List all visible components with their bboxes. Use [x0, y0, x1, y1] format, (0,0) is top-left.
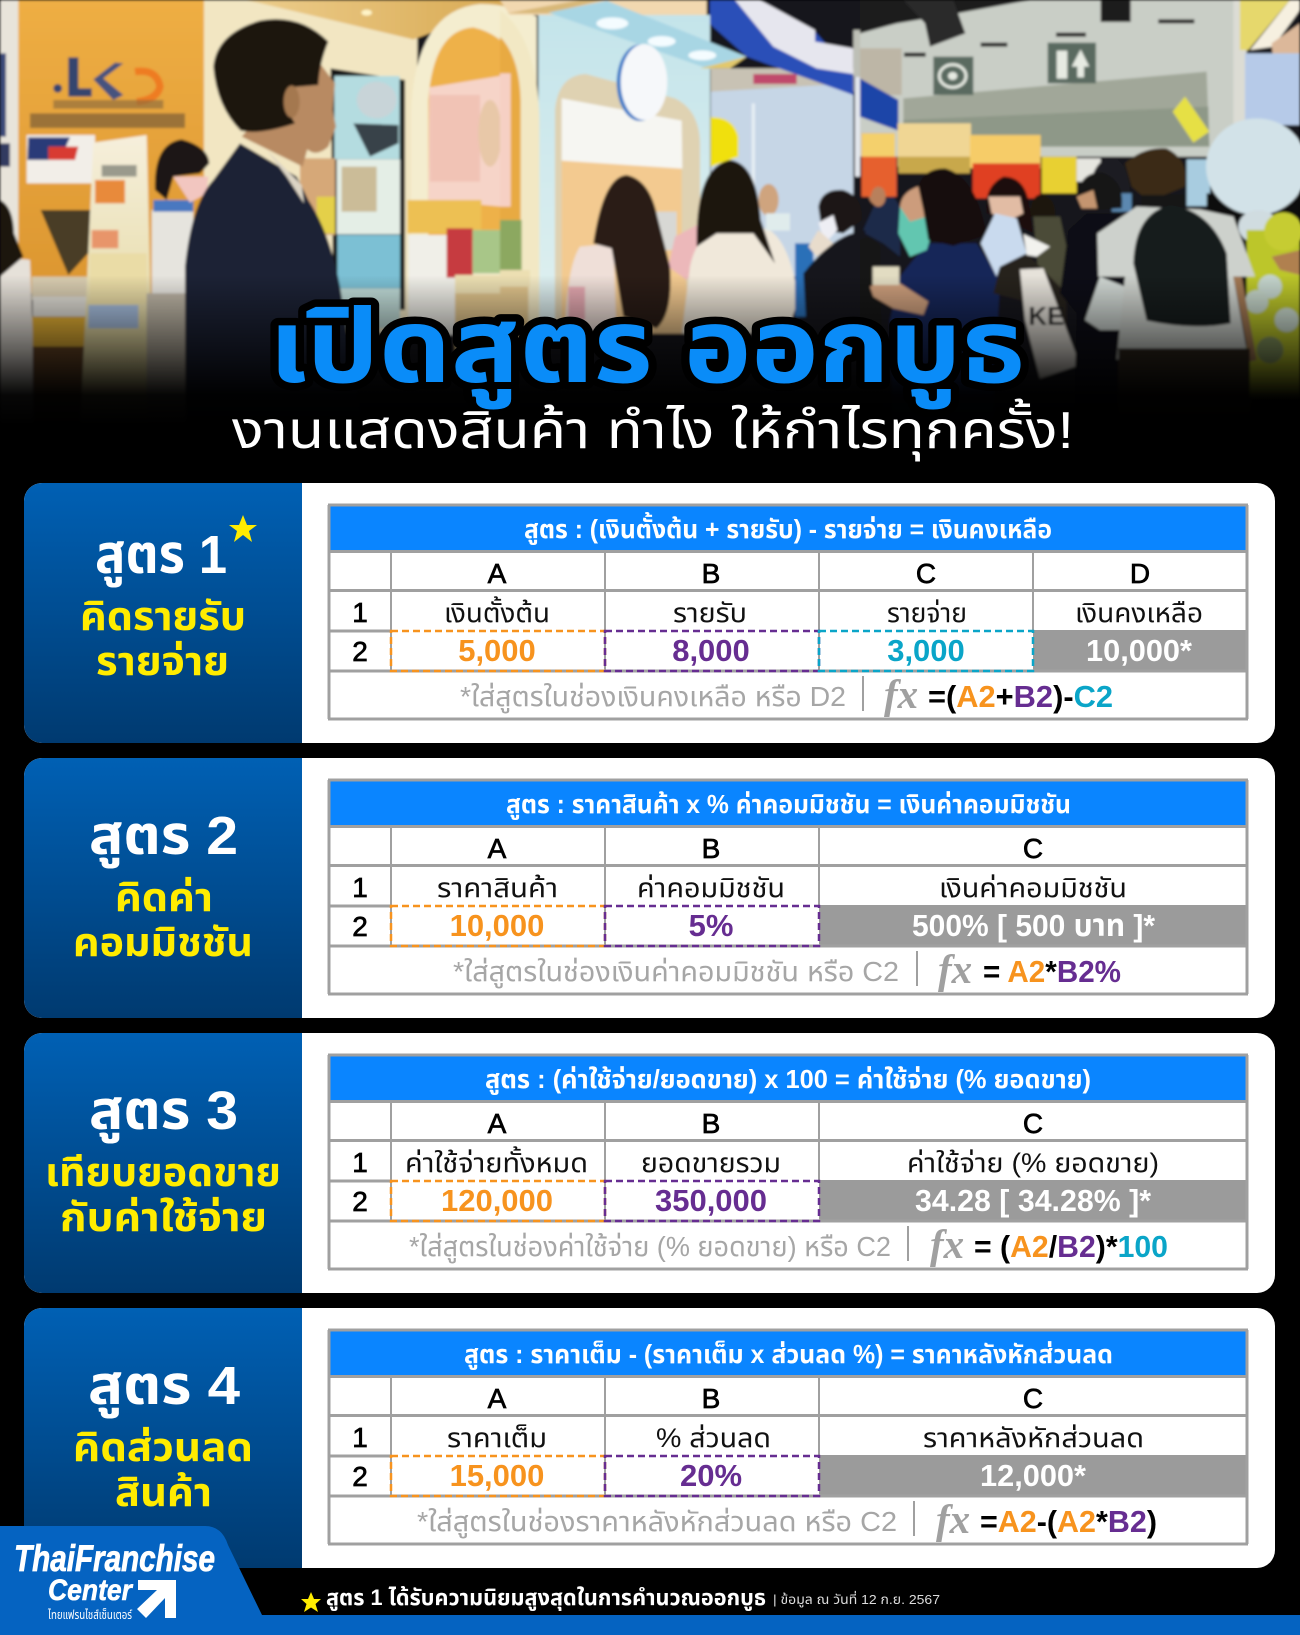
- spreadsheet table 4: สูตร : ราคาเต็ม - (ราคาเต็ม x ส่วนลด %) = ราคาหลังหักส่วนลด: [464, 1339, 1113, 1370]
- spreadsheet table 3: *ใส่สูตรในช่องค่าใช้จ่าย (% ยอดขาย) หรือ C2: [409, 1231, 891, 1264]
- spreadsheet table 1: เงินคงเหลือ: [1075, 598, 1203, 628]
- spreadsheet table 2: สูตร : ราคาสินค้า x % ค่าคอมมิชชัน = เงินค่าคอมมิชชัน: [506, 789, 1071, 820]
- spreadsheet table 1: 8,000: [672, 633, 750, 668]
- spreadsheet table 1: รายรับ: [673, 598, 747, 628]
- spreadsheet table 2: 2: [352, 911, 368, 942]
- spreadsheet table 3: C: [1023, 1108, 1043, 1139]
- spreadsheet table 3: A: [488, 1108, 507, 1139]
- spreadsheet table 2: 5%: [689, 908, 733, 943]
- spreadsheet table 2: C: [1023, 833, 1043, 864]
- logo: ThaiFranchise Center: Center: [48, 1574, 134, 1607]
- spreadsheet table 1: B: [702, 558, 720, 589]
- spreadsheet table 2: เงินค่าคอมมิชชัน: [939, 873, 1127, 903]
- spreadsheet table 3: B: [702, 1108, 720, 1139]
- side label: formula 2: คิดค่า: [115, 875, 213, 920]
- spreadsheet table 4: ราคาหลังหักส่วนลด: [923, 1423, 1144, 1453]
- spreadsheet table 1: 3,000: [887, 633, 965, 668]
- spreadsheet table 2: 10,000: [450, 908, 544, 943]
- spreadsheet table 4: *ใส่สูตรในช่องราคาหลังหักส่วนลด หรือ C2: [417, 1506, 897, 1539]
- side label: formula 3: [24, 1033, 302, 1293]
- spreadsheet table 3: = (A2/B2)*100: [974, 1229, 1168, 1264]
- side label: formula 4: [24, 1308, 302, 1568]
- side label: formula 1: รายจ่าย: [96, 639, 229, 684]
- spreadsheet table 3: ยอดขายรวม: [641, 1148, 781, 1178]
- hero photo: trade show booths and crowd: KE: [1028, 301, 1064, 331]
- spreadsheet table 4: 2: [352, 1461, 368, 1492]
- spreadsheet table 3: 120,000: [441, 1183, 553, 1218]
- spreadsheet table 2: B: [702, 833, 720, 864]
- spreadsheet table 4: 20%: [680, 1458, 742, 1493]
- spreadsheet table 1: D: [1130, 558, 1150, 589]
- spreadsheet table 3: สูตร : (ค่าใช้จ่าย/ยอดขาย) x 100 = ค่าใช้จ่าย (% ยอดขาย): [485, 1064, 1091, 1095]
- spreadsheet table 1: 5,000: [458, 633, 536, 668]
- side label: formula 2: สูตร 2: [89, 806, 238, 868]
- spreadsheet table 3: [328, 1055, 1248, 1269]
- spreadsheet table 1: 1: [352, 597, 368, 628]
- side label: formula 2: [24, 758, 302, 1018]
- spreadsheet table 2: [328, 780, 1248, 994]
- subtitle: งานแสดงสินค้า ทำไง ให้กำไรทุกครั้ง!: [232, 398, 1074, 462]
- spreadsheet table 1: สูตร : (เงินตั้งต้น + รายรับ) - รายจ่าย = เงินคงเหลือ: [524, 512, 1052, 545]
- spreadsheet table 2: A: [488, 833, 507, 864]
- spreadsheet table 3: 34.28 [ 34.28% ]*: [915, 1183, 1152, 1218]
- spreadsheet table 4: B: [702, 1383, 720, 1414]
- side label: formula 3: เทียบยอดขาย: [45, 1151, 281, 1195]
- spreadsheet table 2: ราคาสินค้า: [437, 873, 558, 903]
- side label: formula 2: คอมมิชชัน: [73, 921, 253, 965]
- spreadsheet table 4: % ส่วนลด: [656, 1423, 771, 1453]
- side label: formula 3: สูตร 3: [89, 1081, 238, 1143]
- spreadsheet table 3: 1: [352, 1147, 368, 1178]
- footnote: | ข้อมูล ณ วันที่ 12 ก.ย. 2567: [773, 1590, 940, 1607]
- side label: formula 1: คิดรายรับ: [80, 595, 246, 639]
- spreadsheet table 2: = A2*B2%: [983, 954, 1121, 989]
- spreadsheet table 3: 2: [352, 1186, 368, 1217]
- spreadsheet table 1: [328, 505, 1248, 719]
- footer strip and logo badge: [0, 1526, 1300, 1635]
- photo fade to black: [0, 275, 1300, 425]
- spreadsheet table 4: ราคาเต็ม: [447, 1423, 547, 1453]
- spreadsheet table 4: C: [1023, 1383, 1043, 1414]
- panel: formula 2: [24, 758, 1275, 1018]
- spreadsheet table 4: =A2-(A2*B2): [980, 1504, 1157, 1539]
- spreadsheet table 2: 500% [ 500 บาท ]*: [912, 908, 1156, 943]
- side label: formula 3: กับค่าใช้จ่าย: [60, 1195, 267, 1240]
- panel: formula 1: [24, 483, 1275, 743]
- spreadsheet table 1: fx: [884, 671, 918, 717]
- logo: ThaiFranchise Center: ThaiFranchise: [14, 1538, 215, 1579]
- side label: formula 1: สูตร 1: [95, 525, 227, 587]
- spreadsheet table 4: [328, 1330, 1248, 1544]
- side label: formula 4: สินค้า: [115, 1470, 212, 1515]
- hero photo: trade show booths and crowd: [0, 0, 1300, 464]
- spreadsheet table 2: *ใส่สูตรในช่องเงินค่าคอมมิชชัน หรือ C2: [453, 956, 899, 989]
- spreadsheet table 2: fx: [938, 946, 972, 992]
- spreadsheet table 1: =(A2+B2)-C2: [928, 679, 1113, 714]
- spreadsheet table 1: 10,000*: [1086, 633, 1193, 668]
- footnote: [301, 1585, 940, 1612]
- spreadsheet table 4: 12,000*: [980, 1458, 1087, 1493]
- panel: formula 3: [24, 1033, 1275, 1293]
- spreadsheet table 3: fx: [930, 1221, 964, 1267]
- spreadsheet table 1: 2: [352, 636, 368, 667]
- spreadsheet table 2: 1: [352, 872, 368, 903]
- spreadsheet table 1: C: [916, 558, 936, 589]
- spreadsheet table 3: ค่าใช้จ่ายทั้งหมด: [405, 1146, 588, 1178]
- footnote: สูตร 1 ได้รับความนิยมสูงสุดในการคำนวณออกบูธ: [326, 1585, 766, 1611]
- side label: formula 4: คิดส่วนลด: [73, 1425, 253, 1470]
- spreadsheet table 3: ค่าใช้จ่าย (% ยอดขาย): [907, 1148, 1159, 1178]
- spreadsheet table 3: 350,000: [655, 1183, 767, 1218]
- logo: ThaiFranchise Center: [14, 1538, 215, 1622]
- spreadsheet table 2: ค่าคอมมิชชัน: [637, 873, 785, 903]
- logo: ThaiFranchise Center: ไทยแฟรนไชส์เซ็นเตอร์: [47, 1608, 132, 1622]
- spreadsheet table 4: 1: [352, 1422, 368, 1453]
- spreadsheet table 1: รายจ่าย: [887, 598, 967, 628]
- panel: formula 4: [24, 1308, 1275, 1568]
- icon: arrow: [137, 1580, 176, 1618]
- spreadsheet table 4: A: [488, 1383, 507, 1414]
- spreadsheet table 1: เงินตั้งต้น: [444, 596, 550, 628]
- side label: formula 4: สูตร 4: [88, 1356, 240, 1418]
- title: เปิดสูตร ออกบูธ: [269, 289, 1025, 409]
- spreadsheet table 4: 15,000: [450, 1458, 544, 1493]
- spreadsheet table 1: *ใส่สูตรในช่องเงินคงเหลือ หรือ D2: [460, 681, 846, 714]
- spreadsheet table 1: A: [488, 558, 507, 589]
- spreadsheet table 4: fx: [936, 1496, 970, 1542]
- side label: formula 1: [24, 483, 302, 743]
